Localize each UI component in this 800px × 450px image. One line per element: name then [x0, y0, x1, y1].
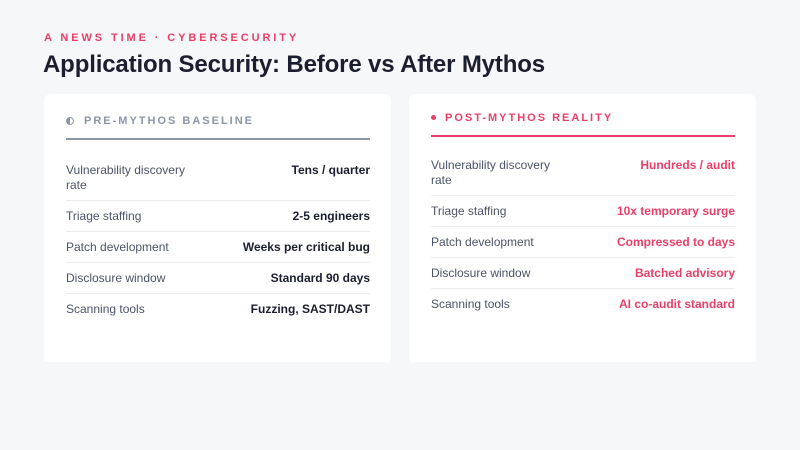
rows: post-mythos: Triage staffing — [431, 204, 506, 218]
rows: post-mythos: Batched advisory — [635, 266, 735, 280]
rows: post-mythos: Scanning tools — [431, 297, 510, 311]
rows: post-mythos: Patch development — [431, 235, 534, 249]
panel: post-mythos reality — [409, 94, 756, 362]
rows: post-mythos: Disclosure window — [431, 266, 530, 280]
rows: post-mythos: 10x temporary surge — [617, 204, 735, 218]
eyebrow: A NEWS TIME · CYBERSECURITY — [44, 32, 299, 44]
panel header: post-mythos: POST-MYTHOS REALITY — [445, 112, 613, 124]
rows: pre-mythos: Standard 90 days — [271, 271, 370, 285]
rows: post-mythos: AI co-audit standard — [619, 297, 735, 311]
rows: post-mythos: rate — [431, 173, 452, 187]
rows: pre-mythos: Scanning tools — [66, 302, 145, 316]
rows: pre-mythos: Vulnerability discovery — [66, 163, 185, 177]
rows: pre-mythos: Patch development — [66, 240, 169, 254]
rows: pre-mythos — [66, 163, 370, 316]
rows: pre-mythos: rate — [66, 178, 87, 192]
rows: pre-mythos: Triage staffing — [66, 209, 141, 223]
rows: pre-mythos: Tens / quarter — [292, 163, 370, 177]
rows: pre-mythos: Weeks per critical bug — [243, 240, 370, 254]
rows: post-mythos: Hundreds / audit — [640, 158, 735, 172]
rows: pre-mythos: 2-5 engineers — [293, 209, 370, 223]
panel: pre-mythos baseline — [44, 94, 391, 362]
panel header: pre-mythos — [66, 94, 370, 140]
rows: post-mythos: Vulnerability discovery — [431, 158, 550, 172]
panel header: post-mythos — [431, 94, 735, 137]
rows: pre-mythos: Disclosure window — [66, 271, 165, 285]
rows: pre-mythos: Fuzzing, SAST/DAST — [251, 302, 370, 316]
rows: post-mythos: Compressed to days — [617, 235, 735, 249]
panel header: pre-mythos: PRE-MYTHOS BASELINE — [84, 115, 254, 127]
title: Application Security: Before vs After Mythos — [43, 51, 545, 78]
rows: post-mythos — [431, 158, 735, 311]
